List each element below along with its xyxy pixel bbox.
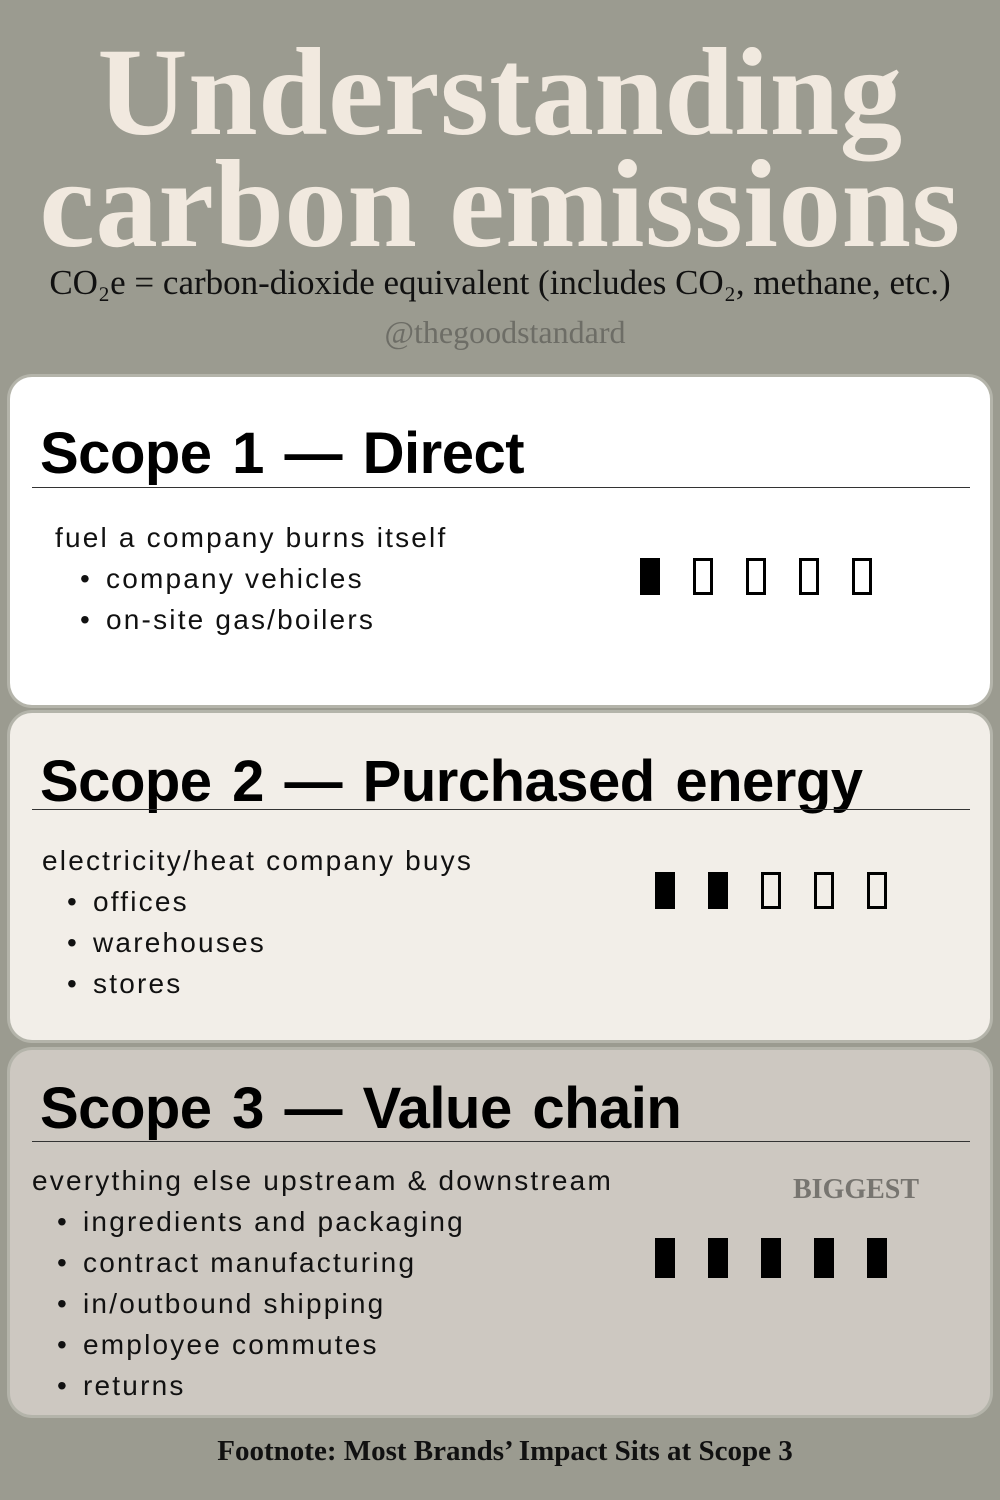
title: carbon emissions [39,136,961,274]
text: scope 3 description: ingredients and packaging [83,1206,465,1237]
heading: scope 2: Scope 2 — Purchased energy [40,749,863,814]
heading: scope 3: Scope 3 — Value chain [40,1076,681,1141]
text: scope 3 description: employee commutes [83,1329,379,1360]
handle: @thegoodstandard [385,314,625,350]
panel: scope 3 [10,1050,990,1415]
text: scope 2 description: offices [93,886,189,917]
footnote: Footnote: Most Brands’ Impact Sits at Scope 3 [217,1435,793,1467]
text: scope 1 description: fuel a company burns itself [55,522,447,553]
label: biggest: BIGGEST [793,1174,919,1205]
panel: scope 1 [10,377,990,705]
text: scope 3 description: returns [83,1370,186,1401]
text: scope 3 description: everything else upstream & downstream [32,1165,613,1196]
text: scope 1 description [55,522,447,635]
subtitle: CO₂e = carbon-dioxide equivalent (includes CO₂, methane, etc.) [49,263,951,302]
heading: scope 1: Scope 1 — Direct [40,421,524,486]
text: scope 3 description: contract manufacturing [83,1247,416,1278]
text: scope 2 description [42,845,473,999]
text: scope 2 description: warehouses [93,927,266,958]
text: scope 2 description: stores [93,968,182,999]
panel: scope 2 [10,713,990,1040]
text: scope 3 description [32,1165,613,1401]
rating bars: 5 of 5 [655,1238,887,1278]
text: scope 1 description: company vehicles [106,563,364,594]
text: scope 2 description: electricity/heat company buys [42,845,473,876]
title [39,24,961,274]
text: scope 1 description: on-site gas/boilers [106,604,375,635]
rating bars: 1 of 5 [640,558,872,595]
rating bars: 2 of 5 [655,872,887,909]
title: Understanding [97,24,903,162]
text: scope 3 description: in/outbound shipping [83,1288,385,1319]
